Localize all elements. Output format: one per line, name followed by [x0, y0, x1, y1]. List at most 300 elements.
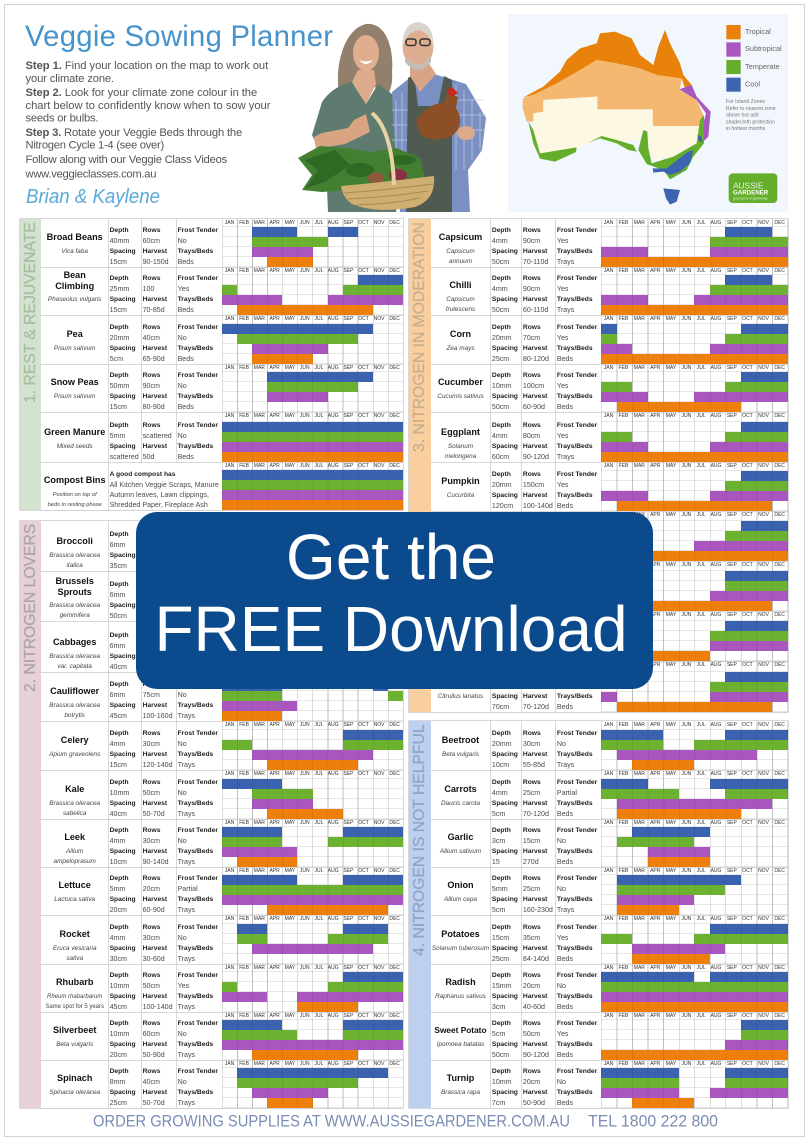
crop row: Onion: [431, 867, 788, 915]
growing details: Frost Tender: [557, 324, 597, 331]
crop name: Leek: [64, 832, 85, 842]
growing details: 6mm: [110, 691, 125, 699]
growing details: 50cm: [143, 789, 160, 797]
woman's smile: [359, 60, 373, 64]
growing details: Frost Tender: [557, 779, 597, 786]
crop name: Allium: [66, 848, 83, 855]
growing details: Trays/Beds: [557, 296, 593, 303]
crop name: [41, 915, 108, 964]
crop name: Apium graveolens: [49, 751, 100, 758]
growing details: 120-140d: [143, 761, 173, 769]
monthly sowing chart: JAN FEB MAR APR MAY JUN JUL AUG SEP OCT NOV DEC: [225, 868, 400, 874]
growing details: Beds: [557, 858, 573, 866]
crop name: [441, 476, 480, 499]
growing details: 45cm: [110, 1003, 127, 1011]
growing details: 5cm: [110, 355, 123, 363]
growing details: No: [557, 837, 566, 845]
crop name: Cabbages: [53, 637, 96, 647]
growing details: Depth: [492, 372, 511, 379]
crop name: Brassica oleracea: [49, 602, 100, 609]
growing details: Frost Tender: [557, 471, 597, 478]
growing details: Trays: [178, 1099, 195, 1107]
growing details: No: [557, 1078, 566, 1086]
crop name: Brassica oleracea: [49, 653, 100, 660]
growing details: Trays/Beds: [178, 1089, 213, 1096]
crop name: Capsicum: [446, 248, 475, 255]
monthly sowing chart: JAN FEB MAR APR MAY JUN JUL AUG SEP OCT NOV DEC: [604, 268, 785, 274]
crop name: var. capitata: [57, 663, 92, 670]
growing details: 25cm: [523, 789, 540, 797]
growing details: Beds: [178, 306, 194, 314]
growing details: 10mm: [110, 982, 129, 990]
growing details: Beds: [178, 453, 194, 461]
crop name: [44, 475, 106, 508]
climate map panel: [508, 14, 788, 212]
crop name: Brassica oleracea: [49, 702, 100, 709]
growing details: Rows: [523, 1068, 541, 1075]
growing details: Trays/Beds: [178, 702, 213, 709]
monthly sowing chart: [601, 721, 788, 770]
growing details: 60cm: [143, 1030, 160, 1038]
inland tropical: [523, 60, 703, 126]
crop name: Rocket: [60, 929, 90, 939]
growing details: Rows: [523, 924, 541, 931]
growing details: 30cm: [143, 934, 160, 942]
growing details: Partial: [557, 789, 577, 797]
basket handle: [372, 113, 394, 185]
crop name: [47, 232, 103, 255]
crop name: [431, 867, 490, 915]
crop name: Garlic: [448, 832, 473, 842]
crop row: Spinach: [41, 1060, 403, 1108]
section band label: [409, 219, 431, 712]
crop row: Broad Beans: [41, 219, 403, 267]
growing details: 40mm: [110, 237, 129, 245]
crop name: Beta vulgaris: [442, 751, 479, 758]
monthly sowing chart: [601, 661, 788, 712]
growing details: Yes: [557, 481, 568, 489]
growing details: Trays: [178, 810, 195, 818]
monthly sowing chart: [222, 267, 403, 315]
growing details: Harvest: [143, 248, 167, 255]
man's head: [402, 24, 434, 68]
growing details: Yes: [557, 334, 568, 342]
growing details: 60-90d: [143, 906, 165, 914]
monthly sowing chart: [601, 462, 788, 511]
growing details: Harvest: [523, 896, 547, 903]
callout banner: Get the FREE Download: Get the: [286, 521, 496, 593]
growing details: Spacing: [110, 602, 136, 609]
growing details: Depth: [110, 531, 129, 538]
vegetables: [368, 169, 407, 184]
crop name: [49, 784, 100, 817]
woman's shirt: [312, 82, 404, 212]
growing details: 60cm: [143, 237, 160, 245]
growing details: Frost Tender: [557, 372, 597, 379]
crop name: Allium cepa: [444, 896, 477, 903]
growing details: Rows: [143, 227, 160, 234]
growing details: 25cm: [110, 1099, 127, 1107]
crop name: ampeloprasum: [54, 858, 96, 865]
growing details: Depth: [110, 632, 129, 639]
growing details: [110, 275, 218, 314]
growing details: 10mm: [110, 1030, 129, 1038]
crop name: Eggplant: [441, 427, 480, 437]
growing details: Trays: [557, 453, 574, 461]
growing details: Trays/Beds: [557, 848, 593, 855]
growing details: 25cm: [492, 355, 509, 363]
growing details: Trays/Beds: [557, 443, 593, 450]
woman's arm: [314, 114, 370, 149]
growing details: 15cm: [110, 306, 127, 314]
growing details: 20cm: [143, 885, 160, 893]
growing details: Yes: [557, 934, 568, 942]
monthly sowing chart: JAN FEB MAR APR MAY JUN JUL AUG SEP OCT NOV DEC: [225, 673, 400, 679]
growing details: Spacing: [492, 693, 518, 700]
growing details: 50cm: [492, 1051, 509, 1059]
growing details: Spacing: [110, 393, 136, 400]
growing details: Trays/Beds: [557, 751, 593, 758]
crop row: Cucumber: [431, 364, 788, 412]
photo: Brian and Kaylene with basket and hen: [298, 22, 486, 212]
growing details: Frost Tender: [178, 372, 218, 379]
logo: Aussie Gardener: good grow & gardening: [733, 196, 768, 200]
section band label: [20, 521, 41, 1108]
man's apron: [406, 74, 452, 212]
growing details: Yes: [557, 432, 568, 440]
growing details: 7cm: [492, 1099, 505, 1107]
growing details: [490, 1060, 601, 1108]
section band label: [20, 219, 41, 510]
growing details: 50cm: [523, 1030, 540, 1038]
panel: 3. Nitrogen in Moderation: [409, 219, 788, 712]
growing details: 100cm: [523, 382, 544, 390]
growing details: 90cm: [143, 382, 160, 390]
crop name: sabelica: [63, 810, 86, 817]
crop name: Broccoli: [56, 536, 93, 546]
inland temperate: [533, 97, 700, 160]
monthly sowing chart: JAN FEB MAR APR MAY JUN JUL AUG SEP OCT NOV DEC: [225, 365, 400, 371]
crop row: Cabbages: [41, 621, 403, 672]
crop row: partly hidden by banner: [431, 511, 788, 561]
crop name: [431, 1012, 490, 1060]
growing details: 10mm: [492, 382, 512, 390]
growing details: 3cm: [492, 837, 505, 845]
growing details: Beds: [557, 355, 573, 363]
crop row: Radish: [431, 964, 788, 1012]
monthly sowing chart: [222, 315, 403, 364]
growing details: 50-90d: [143, 1051, 165, 1059]
growing details: Frost Tender: [178, 779, 218, 786]
compost notes: A good compost has: [110, 471, 175, 478]
monthly sowing chart: JAN FEB MAR APR MAY JUN JUL AUG SEP OCT NOV DEC: [225, 268, 400, 274]
growing details: Rows: [143, 875, 160, 882]
growing details: Rows: [523, 875, 541, 882]
crop name: Climbing: [55, 281, 94, 291]
growing details: [490, 1012, 601, 1060]
crop name: Turnip: [447, 1073, 474, 1083]
growing details: Frost Tender: [178, 1020, 218, 1027]
growing details: 4mm: [492, 789, 508, 797]
growing details: Frost Tender: [178, 275, 218, 282]
growing details: Trays/Beds: [178, 848, 213, 855]
basket: [341, 176, 434, 210]
crop name: melongena: [445, 453, 476, 460]
monthly sowing chart: [222, 1060, 403, 1108]
monthly sowing chart: [222, 672, 403, 721]
growing details: Rows: [523, 324, 541, 331]
crop name: [49, 536, 100, 569]
monthly sowing chart: JAN FEB MAR APR MAY JUN JUL AUG SEP OCT NOV DEC: [604, 868, 785, 874]
growing details: Beds: [557, 1099, 573, 1107]
growing details: Trays/Beds: [557, 945, 593, 952]
crop row: Leek: [41, 819, 403, 867]
growing details: Frost Tender: [178, 827, 218, 834]
growing details: 40cm: [110, 810, 127, 818]
growing details: Depth: [110, 1020, 129, 1027]
panel: 2. Nitrogen Lovers: [20, 521, 403, 1108]
growing details: Frost Tender: [178, 422, 218, 429]
growing details: [110, 779, 218, 818]
growing details: Beds: [557, 810, 573, 818]
growing details: Trays/Beds: [178, 993, 213, 1000]
growing details: Harvest: [523, 393, 547, 400]
growing details: Harvest: [523, 945, 547, 952]
growing details: [490, 819, 601, 867]
footer order line: ORDER GROWING SUPPLIES AT WWW.AUSSIEGARDENER.COM.AU: [93, 1112, 570, 1130]
growing details: [492, 372, 598, 411]
growing details: Beds: [178, 403, 194, 411]
crop name: Cucurbita: [447, 492, 474, 499]
growing details: Rows: [523, 275, 541, 282]
woman's face: [353, 35, 379, 71]
crop row: Citrullus lanatus: [431, 661, 788, 712]
growing details: [110, 372, 218, 411]
hen: [416, 93, 460, 140]
growing details: Depth: [110, 422, 129, 429]
growing details: Yes: [178, 982, 189, 990]
crop name: Pisum sativum: [54, 345, 95, 352]
growing details: 20mm: [492, 740, 512, 748]
growing details: 40-60d: [523, 1003, 545, 1011]
growing details: Rows: [523, 227, 541, 234]
crop name: Beta vulgaris: [56, 1041, 93, 1048]
growing details: Rows: [143, 779, 160, 786]
growing details: Depth: [110, 581, 129, 588]
crop name: Raphanus sativus: [435, 993, 486, 1000]
growing details: No: [178, 740, 187, 748]
growing details: Spacing: [110, 443, 136, 450]
growing details: Harvest: [523, 751, 547, 758]
crop row: Capsicum: [431, 219, 788, 267]
crop row: Compost Bins: [41, 462, 403, 510]
monthly sowing chart: [601, 770, 788, 819]
monthly sowing chart: JAN FEB MAR APR MAY JUN JUL AUG SEP OCT NOV DEC: [604, 1061, 785, 1067]
man's beard: [405, 55, 431, 70]
crop row: Garlic: [431, 819, 788, 867]
growing details: Spacing: [110, 1089, 136, 1096]
growing details: Trays/Beds: [178, 945, 213, 952]
crop name: beds in resting phase: [48, 502, 102, 508]
growing details: 90-120d: [523, 453, 549, 461]
growing details: Rows: [523, 1020, 541, 1027]
growing details: Frost Tender: [178, 875, 218, 882]
growing details: [108, 1012, 222, 1060]
growing details: Spacing: [110, 552, 136, 559]
growing details: 4mm: [110, 934, 125, 942]
crop name: Mixed seeds: [57, 443, 93, 450]
crop name: [446, 280, 475, 313]
growing details: 84-140d: [523, 955, 549, 963]
crop name: [431, 964, 490, 1012]
crop name: gemmifera: [60, 612, 90, 619]
growing details: 6mm: [110, 541, 125, 549]
growing details: [110, 422, 218, 461]
growing details: 5cm: [492, 906, 505, 914]
growing details: 10mm: [110, 789, 129, 797]
growing details: 20mm: [492, 481, 512, 489]
growing details: Rows: [523, 471, 541, 478]
growing details: Depth: [492, 730, 511, 737]
monthly sowing chart: [601, 412, 788, 462]
growing details: 30-60d: [143, 955, 165, 963]
growing details: [490, 867, 601, 915]
growing details: 20mm: [492, 334, 512, 342]
growing details: Rows: [143, 972, 160, 979]
growing details: 45cm: [110, 712, 127, 720]
growing details: Beds: [557, 703, 573, 711]
growing details: Spacing: [492, 248, 518, 255]
monthly sowing chart: JAN FEB MAR APR MAY JUN JUL AUG SEP OCT NOV DEC: [604, 965, 785, 971]
monthly sowing chart: [601, 364, 788, 412]
monthly sowing chart: JAN FEB MAR APR MAY JUN JUL AUG SEP OCT NOV DEC: [604, 413, 785, 419]
monthly sowing chart: JAN FEB MAR APR MAY JUN JUL AUG SEP OCT NOV DEC: [225, 1013, 400, 1019]
growing details: 20cm: [523, 982, 540, 990]
growing details: 60-90d: [523, 403, 545, 411]
crop name: [49, 686, 100, 719]
monthly sowing chart: [601, 1060, 788, 1108]
crop row: Green Manure: [41, 412, 403, 462]
growing details: 75cm: [143, 691, 160, 699]
growing details: 30cm: [143, 740, 160, 748]
growing details: Spacing: [492, 800, 518, 807]
growing details: Spacing: [492, 945, 518, 952]
growing details: No: [178, 691, 187, 699]
monthly sowing chart: JAN FEB MAR APR MAY JUN JUL AUG SEP OCT NOV DEC: [604, 1013, 785, 1019]
growing details: Trays/Beds: [557, 896, 593, 903]
growing details: 100-140d: [143, 1003, 173, 1011]
growing details: Harvest: [143, 1089, 167, 1096]
crop name: Kale: [65, 784, 84, 794]
crop row: Beetroot: [431, 721, 788, 770]
crop row: Turnip: [431, 1060, 788, 1108]
growing details: Trays: [178, 906, 195, 914]
section band label: 1. REST & REJUVENATE: [22, 222, 39, 403]
monthly sowing chart: [222, 915, 403, 964]
monthly sowing chart: [601, 315, 788, 364]
monthly sowing chart: [222, 1012, 403, 1060]
crop name: [44, 427, 105, 450]
growing details: [108, 1060, 222, 1108]
growing details: 40cm: [143, 1078, 160, 1086]
growing details: Depth: [492, 1020, 511, 1027]
instructions text block: Step 1. Find your location on the map to work out: [26, 60, 269, 72]
crop name: [446, 329, 475, 352]
crop name: [41, 1012, 108, 1060]
growing details: Trays/Beds: [178, 1041, 213, 1048]
crop row: Celery: [41, 721, 403, 770]
growing details: Trays/Beds: [178, 345, 213, 352]
man's hair: [403, 22, 433, 48]
growing details: 70cm: [523, 334, 540, 342]
map legend: Subtropical: [745, 44, 782, 53]
monthly sowing chart: JAN FEB MAR APR MAY JUN JUL AUG SEP OCT NOV DEC: [225, 771, 400, 777]
growing details: Frost Tender: [178, 324, 218, 331]
crop row: Carrots: [431, 770, 788, 819]
monthly sowing chart: JAN FEB MAR APR MAY JUN JUL AUG SEP OCT NOV DEC: [225, 413, 400, 419]
growing details: [490, 721, 601, 770]
growing details: 55-85d: [523, 761, 545, 769]
crop name: [431, 721, 490, 770]
growing details: 90-150d: [143, 258, 169, 266]
growing details: 6mm: [110, 642, 125, 650]
growing details: Depth: [492, 875, 511, 882]
growing details: Trays/Beds: [178, 443, 213, 450]
growing details: Trays: [557, 906, 574, 914]
monthly sowing chart: [601, 964, 788, 1012]
growing details: 5cm: [492, 1030, 505, 1038]
crop name: Radish: [445, 977, 476, 987]
growing details: Depth: [110, 924, 129, 931]
growing details: 70-120d: [523, 703, 549, 711]
growing details: Partial: [178, 885, 198, 893]
crop name: Eruca vesicaria: [53, 945, 97, 952]
growing details: Harvest: [143, 1041, 167, 1048]
growing details: Trays/Beds: [557, 693, 593, 700]
crop name: Brassica oleracea: [49, 800, 100, 807]
growing details: 30cm: [110, 955, 127, 963]
growing details: Trays: [557, 258, 574, 266]
logo: Aussie Gardener: GARDENER: [733, 190, 769, 197]
growing details: Spacing: [110, 702, 136, 709]
woman's hair: [338, 24, 392, 98]
crop name: [49, 637, 100, 670]
growing details: 80-120d: [523, 355, 549, 363]
crop name: Ipomoea batatas: [437, 1041, 484, 1048]
growing details: 70-120d: [523, 810, 549, 818]
growing details: Depth: [492, 924, 511, 931]
crop name: Cucumber: [438, 377, 483, 387]
growing details: Yes: [178, 285, 189, 293]
crop name: Phaseolus vulgaris: [48, 296, 102, 303]
monthly sowing chart: JAN FEB MAR APR MAY JUN JUL AUG SEP OCT NOV DEC: [225, 316, 400, 322]
crop name: italica: [67, 562, 83, 569]
growing details: [492, 422, 598, 461]
monthly sowing chart: [601, 267, 788, 315]
crop row: partly hidden by banner: [431, 561, 788, 611]
growing details: Yes: [557, 285, 568, 293]
growing details: 35cm: [523, 934, 540, 942]
growing details: Depth: [110, 730, 129, 737]
growing details: Harvest: [143, 443, 167, 450]
monthly sowing chart: [222, 412, 403, 462]
map legend: [726, 25, 782, 92]
growing details: 4mm: [492, 237, 508, 245]
growing details: Rows: [523, 422, 541, 429]
growing details: Harvest: [523, 848, 547, 855]
crop row: Corn: [431, 315, 788, 364]
monthly sowing chart: [601, 219, 788, 267]
